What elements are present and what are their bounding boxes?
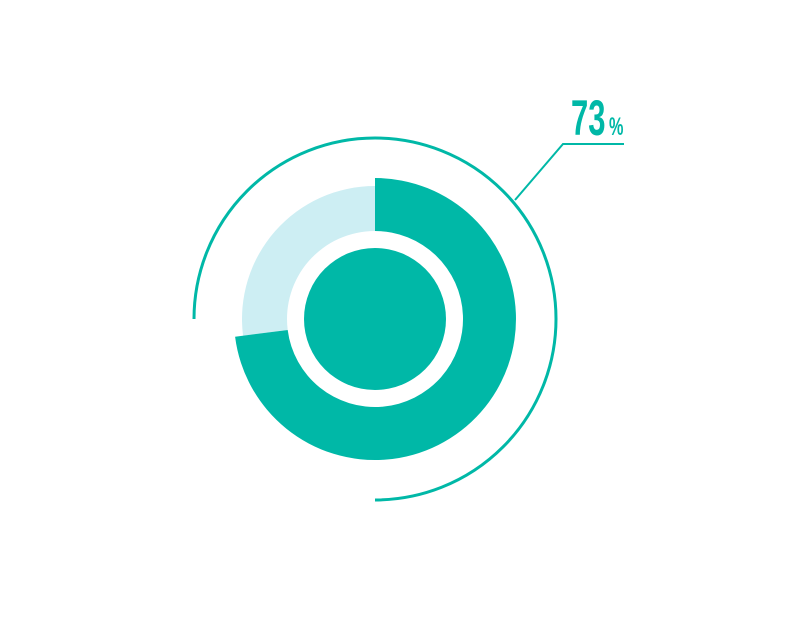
label: 73%: 73 <box>571 89 605 146</box>
outer thin arc <box>194 138 556 500</box>
leader line <box>515 144 624 200</box>
teal 73% sector <box>235 178 516 460</box>
light remainder sector (27%) <box>242 186 375 336</box>
label: 73% <box>571 89 624 146</box>
center circle <box>304 248 446 390</box>
label: 73%: % <box>609 114 624 141</box>
